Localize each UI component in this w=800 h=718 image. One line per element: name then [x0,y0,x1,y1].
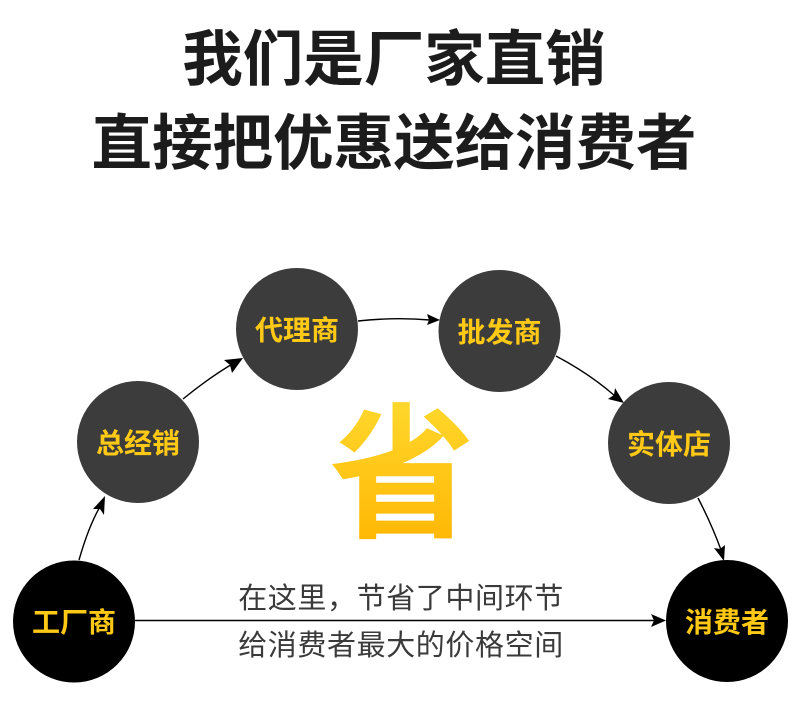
node: distributor: 总经销 [96,428,180,459]
node: wholesaler [438,270,560,392]
node: factory [13,560,135,682]
node: consumer: 消费者 [685,607,769,638]
title: 我们是厂家直销 [182,25,606,93]
caption above line: 在这里，节省了中间环节 [238,582,564,615]
big character: save: 省 [329,394,475,557]
arrow: factory to distributor [79,496,105,560]
arrow: store to consumer [698,498,725,561]
node: agent [236,268,358,390]
node: agent: 代理商 [255,315,339,346]
arrow: agent to wholesaler [358,314,440,325]
arrow: wholesaler to store [556,356,624,403]
node: consumer [666,560,788,682]
node: distributor [77,381,199,503]
node: factory: 工厂商 [32,607,116,638]
node: wholesaler: 批发商 [457,317,542,348]
caption below line: 给消费者最大的价格空间 [238,629,564,662]
node: store [608,382,730,504]
arrow: distributor to agent [183,358,243,399]
title [92,25,696,177]
title: 直接把优惠送给消费者 [92,109,696,177]
node: store: 实体店 [627,429,711,460]
arrow: factory direct to consumer [135,614,666,627]
